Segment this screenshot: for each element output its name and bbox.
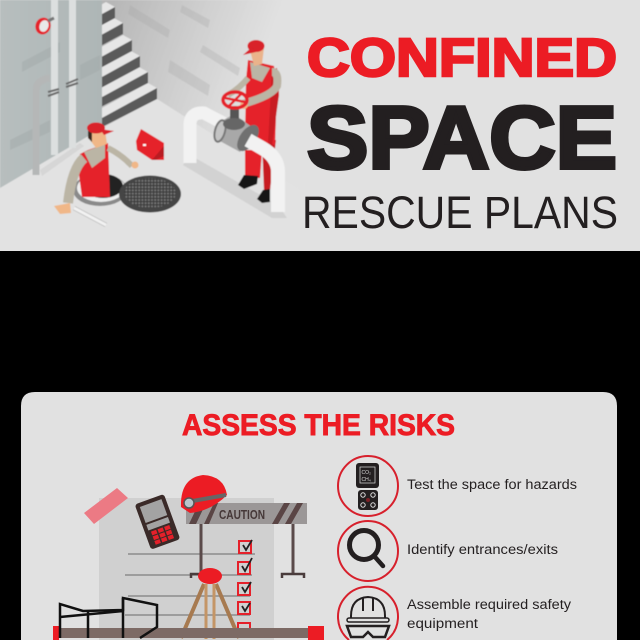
panel: assess the risks [21, 392, 617, 640]
worker arms [242, 72, 277, 104]
step: identify entrances [338, 521, 558, 581]
back wall [102, 0, 300, 190]
heading: space: SPACE [307, 88, 617, 187]
wall bricks left [10, 42, 100, 150]
white pipe [190, 113, 225, 163]
worker head [250, 48, 264, 66]
paper [99, 498, 274, 640]
illustration: confined space scene [0, 0, 286, 227]
heading: confined: CONFINED [307, 28, 617, 88]
wall bricks [128, 5, 240, 96]
manhole cover [119, 176, 181, 212]
worker legs [245, 150, 262, 178]
heading: ASSESS THE RISKS [182, 409, 455, 442]
heading: rescue plans: RESCUE PLANS [302, 187, 618, 238]
step: identify entrances: Identify entrances/exits [407, 542, 558, 557]
checkboxes [238, 541, 251, 635]
worker torso [245, 60, 277, 145]
title [302, 28, 618, 238]
floor [0, 99, 300, 251]
worker body [79, 143, 110, 197]
left wall [0, 0, 102, 188]
icon: magnifier [338, 521, 398, 581]
icon: wrench [74, 208, 106, 225]
step: assemble equipment [338, 587, 571, 640]
icon: gas detector: CH₄ [362, 477, 371, 483]
icon: gas detector [338, 456, 398, 516]
tripod [181, 568, 239, 639]
icon: red helmet [181, 475, 227, 513]
bar with end caps [53, 626, 324, 640]
step: test for hazards [338, 456, 577, 516]
pipes on wall [36, 0, 78, 175]
manhole with worker [54, 122, 181, 214]
valve wheel [223, 92, 247, 108]
caution barrier [186, 503, 307, 578]
valve body [218, 114, 256, 152]
worker head [90, 130, 107, 148]
icon: wall gauge [33, 15, 54, 37]
wall baseboard [40, 143, 84, 176]
banner background [0, 0, 640, 251]
icon: hard hat and goggles [338, 587, 398, 640]
tape [84, 488, 128, 524]
icon: gas meter radio [135, 494, 180, 550]
illustration: checklist [53, 475, 324, 640]
step: test for hazards: Test the space for hazards [407, 477, 577, 492]
step: assemble equipment: equipment [407, 616, 478, 631]
worker boots [238, 175, 258, 189]
pipe and valve with worker [183, 40, 287, 218]
valve stem [230, 106, 239, 124]
stairs [102, 2, 158, 126]
icon: toolbox [136, 129, 164, 160]
caution barrier: CAUTION [219, 508, 265, 522]
black frame [60, 598, 157, 638]
icon: gas detector: CO₂ [362, 470, 371, 476]
step: assemble equipment: Assemble required safety [407, 597, 571, 612]
